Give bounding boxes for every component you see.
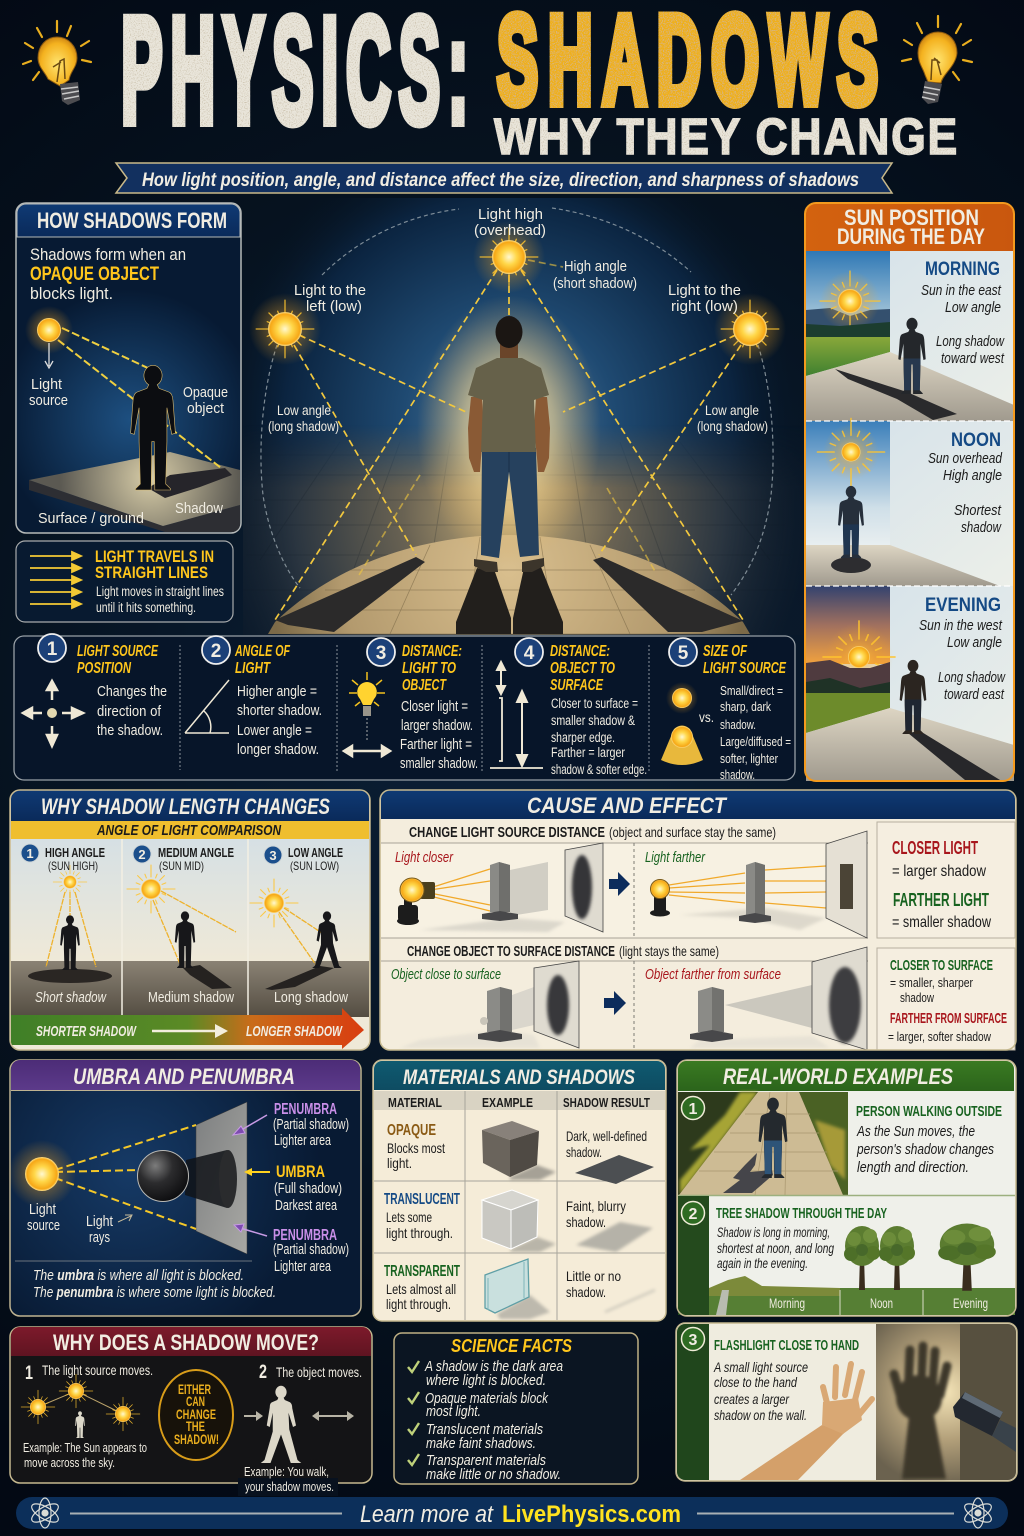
facts: make faint shadows. [426,1435,536,1452]
noon: NOON [951,430,1001,451]
result box: light distance: CLOSER LIGHT [892,838,978,858]
rays [55,1125,196,1229]
table header: MATERIAL [388,1095,442,1110]
row: transparent: Little or no [566,1268,621,1284]
icon: atom right [962,1498,994,1528]
noon: Shortest [954,503,1002,519]
noon [806,418,1014,586]
icon: right light bulb [902,16,972,104]
evening [806,586,1014,781]
shadow on ground [148,468,232,498]
heading: REAL-WORLD EXAMPLES [723,1064,953,1089]
column: medium angle [127,845,236,1006]
factor 4: distance object to surface: OBJECT TO [550,660,615,677]
dashed light rays [275,260,743,620]
definition text: The umbra is where all light is blocked. [33,1267,244,1284]
factor 3: distance light to object: LIGHT TO [402,660,456,677]
row: translucent [384,1190,653,1252]
factor 4: distance object to surface: smaller shadow & [551,713,635,728]
header [17,204,240,237]
intro text: blocks light. [30,284,113,303]
text: A small light source [713,1359,808,1375]
text: LIGHT TRAVELS IN [95,547,214,566]
panel: materials and shadows [373,1060,666,1321]
example 1: person walking outside: As the Sun moves, the [856,1123,975,1140]
evening: toward east [944,687,1005,703]
check marks [408,1361,419,1465]
panel: flashlight close to hand: 3 [689,1332,698,1349]
scene: object farther from surface [645,947,867,1050]
facts: most light. [426,1403,481,1420]
example 1: person walking outside: 1 [689,1101,698,1118]
sub heading strip [11,821,369,839]
heading: DURING THE DAY [837,224,985,249]
row: transparent [384,1259,655,1319]
scene: light farther: Light farther [645,850,706,866]
scene labels: right (low) [671,298,738,315]
row: transparent: shadow. [566,1284,606,1300]
panel: umbra and penumbra [8,1060,361,1316]
morning: MORNING [925,259,1000,280]
heading: CAUSE AND EFFECT [527,793,727,818]
footer bar [16,1497,1008,1529]
factor 3: distance light to object: Closer light = [401,699,468,715]
sub heading: change object to surface distance: CHANGE OBJECT TO SURFACE DISTANCE [407,944,615,960]
text: STRAIGHT LINES [95,563,208,582]
row: transparent: Lets almost all [386,1281,456,1297]
factor 4: distance object to surface: DISTANCE: [550,643,610,660]
column: medium angle: MEDIUM ANGLE [158,845,234,860]
factor 1: light source position: 1 [47,639,58,660]
scene: object close to surface [391,961,579,1048]
factor 2: angle of light: Higher angle = [237,683,317,700]
callouts: Lighter area [274,1259,332,1275]
heading: WHY DOES A SHADOW MOVE? [53,1330,319,1355]
wall with hand shadow and flashlight [876,1324,1016,1480]
factor 1: light source position [23,634,167,746]
row: translucent: shadow. [566,1214,606,1230]
intro text: OPAQUE OBJECT [30,264,159,285]
heading: SUN POSITION [844,205,979,230]
evening: EVENING [925,595,1001,616]
sphere [138,1150,188,1202]
header [678,1061,1014,1091]
morning: toward west [941,351,1005,367]
evening: Sun in the west [919,618,1003,634]
noon: shadow [961,520,1002,536]
factor 5: size of light source: Large/diffused = [720,734,791,749]
callout: either can change the shadow: CAN [186,1394,205,1409]
callout: either can change the shadow: SHADOW! [174,1432,219,1447]
panel: flashlight close to hand [676,1323,1017,1481]
column: medium angle: Medium shadow [148,990,234,1006]
subtitle banner [116,163,892,193]
intro text [30,245,186,303]
row: transparent: TRANSPARENT [384,1263,460,1280]
sub heading: change light source distance [409,824,776,841]
text [713,1359,808,1423]
glow behind person [417,295,601,565]
cause 2: the object moves: Example: You walk, [244,1464,329,1479]
callout: either can change the shadow: THE [186,1419,205,1434]
column: high angle [21,844,112,1006]
heading: FLASHLIGHT CLOSE TO HAND [714,1338,859,1354]
heading: UMBRA AND PENUMBRA [73,1064,295,1089]
facts: Transparent materials [426,1452,546,1469]
morning [806,251,1014,421]
diagram labels: Surface / ground [38,510,144,527]
factor 5: size of light source: shadow. [720,767,755,782]
sub heading: change light source distance: CHANGE LIGHT SOURCE DISTANCE [409,825,605,841]
example 2: tree shadow through the day: Noon [870,1296,893,1311]
row: opaque: light. [387,1155,412,1171]
row: opaque: shadow. [566,1144,602,1160]
scene labels: (short shadow) [553,275,637,292]
header [381,790,1015,819]
factor 4: distance object to surface: SURFACE [550,677,603,694]
factor 1: light source position: Changes the [97,683,167,700]
row: translucent: Faint, blurry [566,1198,626,1214]
evening: Long shadow [938,670,1006,686]
example 2: tree shadow through the day: Evening [953,1296,988,1311]
text: shadow on the wall. [714,1407,807,1423]
person seen from behind [468,316,550,572]
panel: cause and effect [380,790,1016,1050]
header [11,1060,360,1090]
facts: Translucent materials [426,1421,543,1438]
panel: why does a shadow move [10,1327,372,1496]
factor 5: size of light source: sharp, dark [720,699,771,714]
evening: Low angle [947,635,1002,651]
factor 3: distance light to object: Farther light = [400,737,472,753]
result box: surface distance: = smaller, sharper [890,975,974,990]
factor 4: distance object to surface: Farther = larger [551,745,625,760]
arrows [30,552,81,608]
row: transparent: light through. [386,1296,451,1312]
scene labels: Light to the [294,282,366,299]
factor 2: angle of light: 2 [211,641,221,662]
factor 5: size of light source: vs. [699,709,714,725]
heading [837,205,985,249]
call to action [360,1501,681,1528]
example 2: tree shadow through the day: shortest at noon, and long [717,1241,834,1256]
factor 2: angle of light: Lower angle = [237,722,312,739]
facts: A shadow is the dark area [424,1358,563,1375]
sub heading: change light source distance: (object and surface stay the same) [609,824,776,840]
text: until it hits something. [96,600,196,615]
factor 3: distance light to object [344,638,478,772]
opaque object silhouette [131,365,175,490]
row: opaque: Blocks most [387,1140,445,1156]
factor 5: size of light source: SIZE OF [703,643,747,660]
sub heading: change object to surface distance: (light stays the same) [619,943,719,959]
arrow [604,991,626,1015]
factor 3: distance light to object: larger shadow. [401,718,473,734]
factor 4: distance object to surface: shadow & softer edge. [551,762,647,777]
factor 1: light source position: POSITION [77,660,132,677]
diagram labels: Light [31,376,63,393]
factor 4: distance object to surface: 4 [524,643,535,664]
three lights [249,221,786,365]
factor 4: distance object to surface [490,638,647,777]
labels left: Light [86,1213,114,1230]
diagram labels: Opaque [183,384,228,401]
factor 1: light source position: LIGHT SOURCE [77,643,158,660]
scene labels: (overhead) [474,222,546,239]
light source [25,306,73,368]
scene: light closer: Light closer [395,850,454,866]
column: high angle: Short shadow [35,990,107,1006]
cause 2: the object moves: The object moves. [276,1364,362,1380]
panel: sun position during the day [805,203,1014,781]
header [374,1061,665,1090]
scene labels: Low angle [277,402,331,418]
panel: real-world examples [677,1060,1016,1316]
table header: EXAMPLE [482,1095,533,1110]
umbra cone [185,1150,237,1208]
example 1: person walking outside [678,1092,1002,1195]
shorter to longer arrow bar [11,1008,364,1049]
light source [8,1140,76,1208]
callouts: Darkest area [275,1198,338,1214]
scene labels: left (low) [306,298,362,315]
facts: where light is blocked. [426,1372,546,1389]
light rays [58,328,230,475]
noon: High angle [943,468,1002,484]
heading: MATERIALS AND SHADOWS [403,1066,635,1089]
column: medium angle: 2 [138,847,146,862]
diagram labels: Shadow [175,500,223,517]
result box: light distance [877,822,1015,938]
example 2: tree shadow through the day: TREE SHADOW THROUGH THE DAY [716,1206,887,1222]
table header [374,1091,665,1110]
row: opaque: Dark, well-defined [566,1128,647,1144]
callouts: Lighter area [274,1133,332,1149]
column: low angle: Long shadow [274,990,348,1006]
example 2: tree shadow through the day: again in the evening. [717,1256,808,1271]
callout: either can change the shadow [159,1370,233,1460]
long shadows on floor [275,557,425,632]
scene labels [268,206,768,434]
column: low angle: LOW ANGLE [288,845,343,860]
lit ellipse on floor [268,535,750,634]
subtitle banner: How light position, angle, and distance affect the size, direction, and sharpness of shadows [142,169,859,191]
floor [243,425,803,635]
heading: SCIENCE FACTS [451,1336,572,1356]
factor 5: size of light source: LIGHT SOURCE [703,660,786,677]
diagram labels: source [29,392,68,409]
factor 2: angle of light [185,636,322,758]
cause 1: the light source moves [21,1362,153,1470]
call to action: LivePhysics.com [502,1501,681,1528]
row: opaque: OPAQUE [387,1122,436,1139]
callouts: (Partial shadow) [273,1117,349,1133]
callouts: PENUMBRA [273,1227,337,1244]
labels left: Light [29,1201,57,1218]
factor 3: distance light to object: 3 [376,643,386,664]
callouts: (Partial shadow) [273,1242,349,1258]
hand [740,1364,872,1480]
factor 5: size of light source [661,638,791,782]
row: translucent: Lets some [386,1209,432,1225]
labels left: rays [89,1229,110,1246]
text: close to the hand [714,1374,798,1390]
factor 3: distance light to object: OBJECT [402,677,447,694]
text [95,547,224,615]
panel: why shadow length changes [10,790,370,1050]
cause 1: the light source moves: 1 [25,1363,33,1384]
panel: five factors strip [14,634,795,782]
facts: Opaque materials block [425,1390,549,1407]
scene: object close to surface: Object close to surface [391,967,501,983]
result box: surface distance: = larger, softer shadow [888,1029,991,1044]
panel: central light position scene [243,198,803,635]
panel: light travels in straight lines [16,541,233,622]
factor 5: size of light source: Small/direct = [720,683,783,698]
facts: make little or no shadow. [426,1466,561,1483]
scene labels: Light high [478,206,543,223]
factor 5: size of light source: 5 [678,643,689,664]
text: Light moves in straight lines [96,584,224,599]
scene: object farther from surface: Object farther from surface [645,967,781,983]
panel: science facts [394,1333,638,1484]
row: opaque [387,1121,654,1184]
factor 2: angle of light: shorter shadow. [237,702,322,719]
scene labels: High angle [564,258,627,275]
callouts: UMBRA [276,1162,325,1181]
example 2: tree shadow through the day: Shadow is long in morning, [717,1225,830,1240]
arrow [609,872,630,896]
morning: Low angle [945,300,1001,316]
cause 2: the object moves: your shadow moves. [245,1479,334,1494]
result box: surface distance: shadow [900,990,934,1005]
sub heading strip: ANGLE OF LIGHT COMPARISON [96,823,281,839]
diagram labels [29,376,228,527]
shorter to longer arrow bar: SHORTER SHADOW [36,1024,137,1040]
scene: light farther [645,831,867,938]
factor 2: angle of light: ANGLE OF [234,643,290,660]
column: high angle: 1 [26,846,34,861]
result box: light distance: = smaller shadow [892,914,991,931]
diagram labels: object [187,400,225,417]
heading: HOW SHADOWS FORM [37,208,227,233]
column: medium angle: (SUN MID) [159,859,204,873]
column: low angle: (SUN LOW) [290,859,339,873]
header [11,790,369,821]
callout: either can change the shadow: CHANGE [176,1407,216,1422]
factor 4: distance object to surface: Closer to surface = [551,696,638,711]
cause 2: the object moves: 2 [259,1362,267,1383]
definition text: The penumbra is where some light is blocked. [33,1284,276,1301]
screen [196,1102,247,1254]
facts [424,1358,563,1483]
example 2: tree shadow through the day [678,1196,1015,1315]
dashed orbit of light [261,208,773,595]
row: translucent: TRANSLUCENT [384,1191,460,1208]
factor 1: light source position: direction of [97,703,162,720]
header [806,203,1013,251]
header [11,1327,371,1356]
scene labels: (long shadow) [268,418,339,434]
scene: light closer [395,843,603,932]
result box: surface distance [877,948,1015,1050]
row: translucent: light through. [386,1225,453,1241]
factor 5: size of light source: shadow. [720,717,756,732]
column: low angle [250,845,348,1006]
text: creates a larger [714,1391,790,1407]
icon: left light bulb [23,21,91,105]
factor 2: angle of light: LIGHT [235,660,271,677]
icon: atom left [29,1498,61,1528]
column: low angle: 3 [269,848,277,863]
callouts: (Full shadow) [274,1181,342,1197]
factor 4: distance object to surface: sharper edge. [551,730,615,745]
example 2: tree shadow through the day: 2 [689,1206,698,1223]
shorter to longer arrow bar: LONGER SHADOW [246,1024,343,1040]
factor 5: size of light source: softer, lighter [720,751,779,766]
surface [29,452,240,532]
labels left [27,1201,132,1246]
intro text: Shadows form when an [30,245,186,264]
factor 2: angle of light: longer shadow. [237,741,319,758]
morning: Long shadow [936,334,1005,350]
call to action: Learn more at [360,1501,494,1528]
definition text [33,1267,276,1301]
noon: Sun overhead [928,451,1003,467]
labels left: source [27,1217,60,1234]
table header: SHADOW RESULT [563,1095,650,1110]
column: high angle: (SUN HIGH) [48,859,98,873]
factor 3: distance light to object: smaller shadow. [400,756,478,772]
callouts [233,1101,349,1275]
cause 1: the light source moves: The light source moves. [42,1362,153,1378]
callouts: PENUMBRA [274,1101,337,1118]
result box: light distance: = larger shadow [892,863,986,880]
example 2: tree shadow through the day: Morning [769,1296,805,1311]
factor 3: distance light to object: DISTANCE: [402,643,462,660]
scene labels: (long shadow) [697,418,768,434]
morning: Sun in the east [921,283,1002,299]
column: high angle: HIGH ANGLE [45,845,105,860]
factor 1: light source position: the shadow. [97,722,163,739]
cause 2: the object moves [238,1362,362,1496]
scene labels: Light to the [668,282,741,299]
cause 1: the light source moves: move across the sky. [24,1455,115,1470]
heading: WHY SHADOW LENGTH CHANGES [41,794,330,819]
title: Physics: Shadows, why they change: WHY THEY CHANGE [494,108,959,165]
example 1: person walking outside: length and direction. [857,1159,969,1176]
callout: either can change the shadow: EITHER [178,1382,211,1397]
cause 1: the light source moves: Example: The Sun appears to [23,1440,147,1455]
scene labels: Low angle [705,402,759,418]
panel: how shadows form [16,203,241,533]
